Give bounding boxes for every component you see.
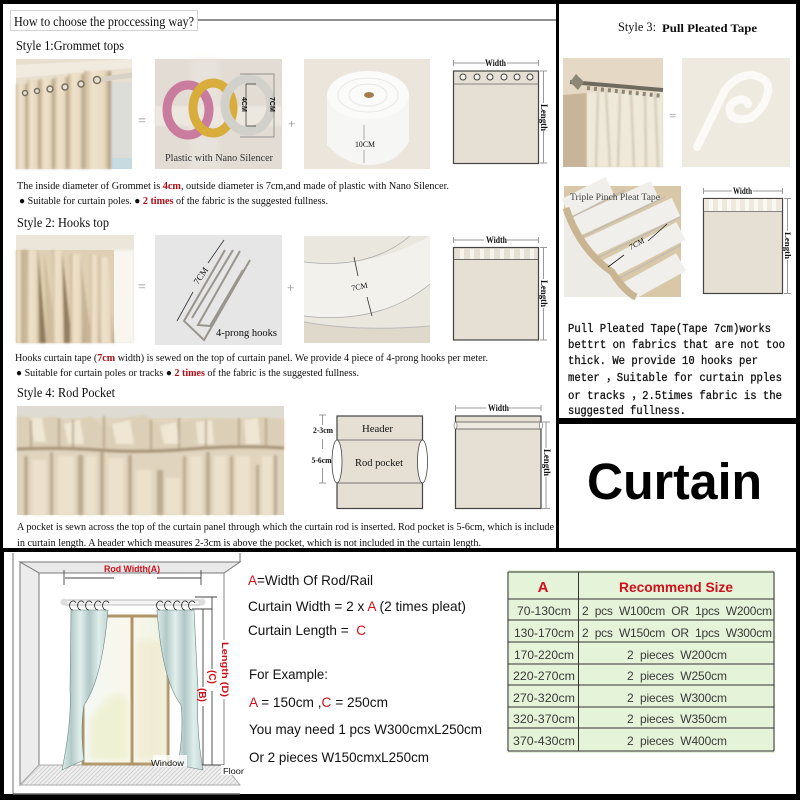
text: style 3 description: suggested fullness.: [568, 404, 686, 418]
left curtain: [62, 610, 108, 770]
table rows: 2 pieces W200cm: [627, 648, 727, 662]
text: style 1 description: The inside diameter of Grommet is 4cm, outside diameter is 7cm,and made of plastic with Nano Silencer.: [17, 181, 449, 192]
diagram: rod pocket panel: [454, 403, 552, 508]
diagram: window and curtain measurement: Window: [151, 758, 185, 768]
diagram: window and curtain measurement: Rod Width(A): [104, 564, 160, 574]
diagram: pleated tape panel: [704, 186, 793, 294]
table header: A: [538, 579, 549, 596]
diagram: rod pocket cross-section: Header: [362, 423, 393, 435]
table: recommended size: [507, 570, 775, 753]
diagram: rod pocket panel: Length: [542, 449, 552, 476]
curtain rod: [60, 598, 206, 610]
text: measuring formulas: Curtain Width = 2 x A (2 times pleat): [248, 598, 466, 614]
photo: triple pinch pleat tape: Triple Pinch Pleat Tape: [570, 193, 660, 203]
panel: processing styles: [3, 4, 556, 549]
text: style 4 description: A pocket is sewn across the top of the curtain panel through which the curtain rod is inserted. Rod pocket is 5-6cm, which is include: [17, 522, 554, 533]
table rows: 2 pcs W100cm OR 1pcs W200cm: [582, 604, 772, 618]
photo: grommet rings: Plastic with Nano Silencer: [165, 153, 273, 164]
diagram: pleated tape panel: Width: [733, 186, 752, 196]
diagram: hooks panel: [454, 235, 549, 340]
photo: tape roll 10cm: 10CM: [355, 140, 375, 149]
table rows: 320-370cm: [513, 712, 575, 726]
panel: style 3 pull pleated tape: [559, 4, 796, 418]
text: measuring formulas: A = 150cm ,C = 250cm: [249, 694, 388, 710]
photo: pleated curtain: [16, 235, 134, 343]
photo: grommet rings: 4CM: [240, 97, 247, 112]
photo: rod pocket curtain: [17, 406, 284, 515]
text: style 4 description: [17, 522, 554, 549]
heading: how to choose: [10, 10, 556, 30]
title: Curtain: Curtain: [587, 453, 762, 510]
table rows: 370-430cm: [513, 734, 575, 748]
equals sign: =: [138, 114, 146, 129]
heading: style 4: Style 4: Rod Pocket: [17, 385, 115, 400]
photo: hook tape 7cm: 7CM: [351, 281, 369, 293]
panel: curtain title: [559, 424, 796, 548]
photo: plastic hook: [682, 58, 790, 167]
plus sign: +: [288, 116, 295, 131]
diagram: window and curtain measurement: [13, 553, 245, 794]
text: style 1 description: ● Suitable for curtain poles. ● 2 times of the fabric is the suggested fullness.: [19, 196, 328, 207]
diagram: window and curtain measurement: (C): [206, 670, 217, 684]
diagram: window and curtain measurement: (B): [196, 688, 207, 702]
table rows: 130-170cm: [514, 626, 574, 640]
equals sign: =: [138, 280, 146, 295]
heading: how to choose: How to choose the proccessing way?: [14, 15, 194, 30]
diagram: window and curtain measurement: Floor: [223, 766, 244, 776]
table rows: 220-270cm: [513, 669, 575, 683]
table header: Recommend Size: [619, 579, 733, 595]
photo: triple pinch pleat tape: [564, 186, 681, 297]
diagram: grommet panel: [454, 58, 549, 164]
heading: style 3: Pull Pleated Tape: [662, 23, 757, 35]
text: style 3 description: thick. We provide 10 hooks per: [568, 354, 758, 368]
diagram: pleated tape panel: Length: [783, 232, 793, 259]
table rows: [513, 604, 772, 748]
text: measuring formulas: A=Width Of Rod/Rail: [248, 572, 373, 588]
diagram: rod pocket cross-section: [312, 415, 428, 508]
heading: style 2: Style 2: Hooks top: [17, 215, 109, 230]
diagram: grommet panel: Width: [485, 58, 506, 68]
table rows: 70-130cm: [517, 604, 571, 618]
text: style 2 description: Hooks curtain tape (7cm width) is sewed on the top of curtain panel. We provide 4 piece of 4-prong hooks per meter.: [15, 353, 488, 364]
text: measuring formulas: You may need 1 pcs W300cmxL250cm: [249, 721, 482, 737]
photo: grommet curtain: [16, 59, 132, 169]
table rows: 2 pcs W150cm OR 1pcs W300cm: [582, 626, 772, 640]
plus sign: +: [287, 280, 294, 295]
text: measuring formulas: [248, 572, 482, 765]
heading: style 1: Style 1:Grommet tops: [16, 38, 124, 53]
text: style 1 description: [17, 181, 449, 207]
table rows: 2 pieces W250cm: [627, 669, 727, 683]
photo: 4-prong hooks: [155, 235, 282, 345]
diagram: grommet panel: Length: [539, 104, 549, 131]
table rows: 2 pieces W350cm: [627, 712, 727, 726]
table rows: 2 pieces W400cm: [627, 734, 727, 748]
text: measuring formulas: Curtain Length = C: [248, 622, 366, 638]
photo: triple pinch pleat tape: 7CM: [628, 235, 647, 252]
photo: tape roll 10cm: [304, 59, 430, 169]
right curtain: [157, 610, 203, 770]
text: measuring formulas: For Example:: [249, 666, 328, 682]
heading: style 3: Style 3:: [618, 19, 656, 34]
measurement arrows: [64, 570, 224, 765]
photo: hook tape 7cm: [304, 236, 430, 343]
table header: [538, 579, 733, 596]
diagram: rod pocket cross-section: 5-6cm: [312, 456, 332, 465]
diagram: hooks panel: Length: [539, 280, 549, 307]
photo: grommet rings: 7CM: [268, 97, 275, 112]
heading: style 3: [618, 19, 757, 35]
equals sign: =: [669, 108, 676, 123]
text: style 3 description: [568, 322, 785, 418]
diagram: rod pocket cross-section: Rod pocket: [355, 457, 403, 469]
diagram: rod pocket cross-section: 2-3cm: [313, 426, 333, 435]
table rows: 270-320cm: [513, 691, 575, 705]
text: style 2 description: ● Suitable for curtain poles or tracks ● 2 times of the fabric is the suggested fullness.: [16, 368, 359, 379]
photo: pinch pleat curtain: [563, 58, 663, 167]
diagram: hooks panel: Width: [486, 235, 507, 245]
text: style 4 description: in curtain length. A header which measures 2-3cm is above the pocket, which is not included in the curtain length.: [17, 538, 481, 549]
text: style 3 description: Pull Pleated Tape(Tape 7cm)works: [568, 322, 771, 336]
photo: grommet rings: [155, 59, 282, 169]
diagram: rod pocket panel: Width: [488, 403, 509, 413]
photo: 4-prong hooks: 7CM: [191, 265, 210, 286]
table rows: 2 pieces W300cm: [627, 691, 727, 705]
window: [83, 616, 168, 764]
panel: measuring guide: [4, 552, 796, 794]
text: measuring formulas: Or 2 pieces W150cmxL250cm: [249, 749, 429, 765]
diagram: window and curtain measurement: Length (D): [219, 642, 230, 697]
table rows: 170-220cm: [514, 648, 574, 662]
photo: 4-prong hooks: 4-prong hooks: [216, 328, 277, 339]
text: style 2 description: [15, 353, 488, 379]
